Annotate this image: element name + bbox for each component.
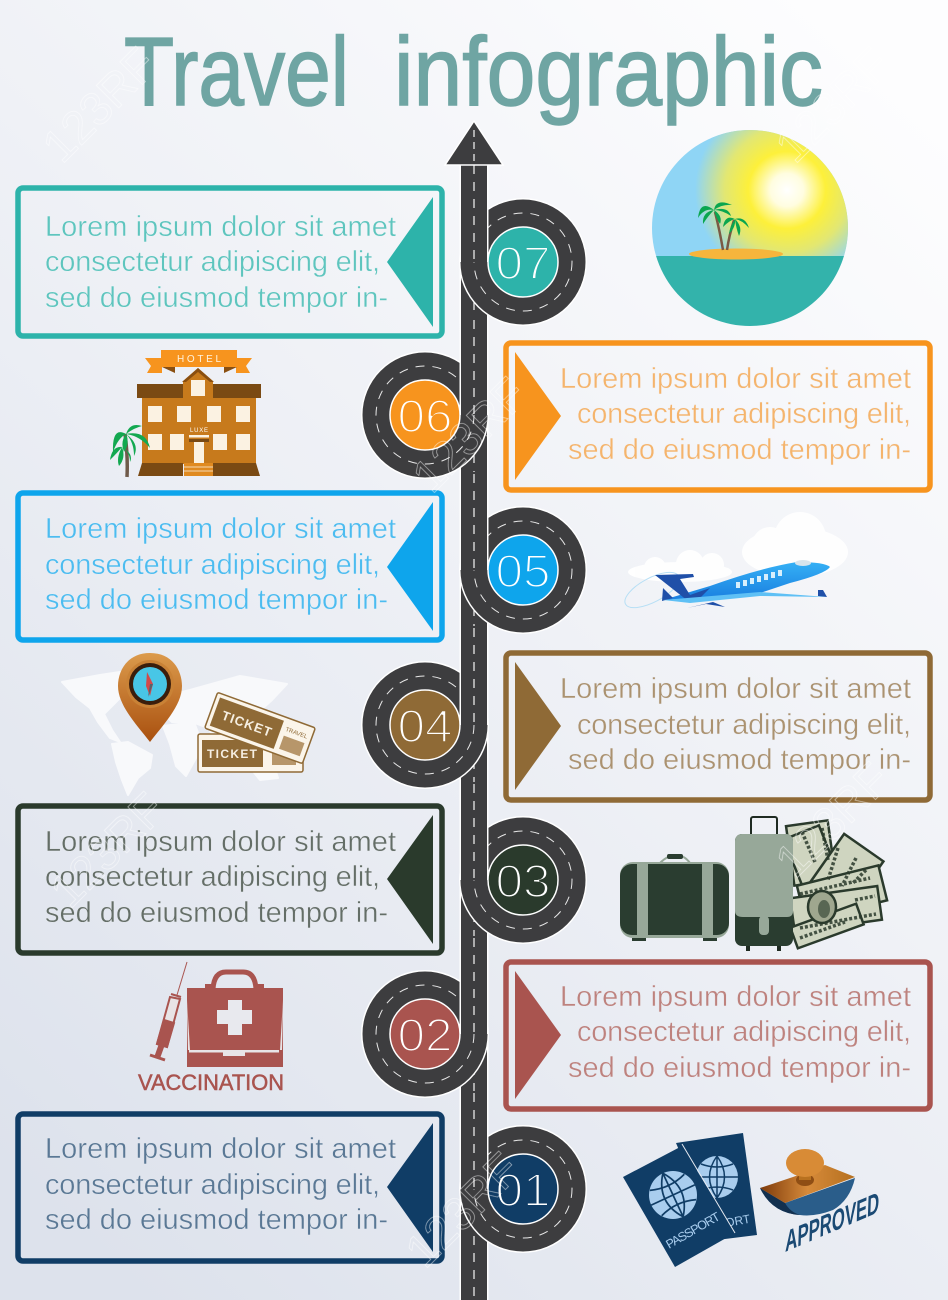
panel: step 07 text	[18, 188, 442, 336]
panel: step 01 text: Lorem ipsum dolor sit amet	[45, 1133, 396, 1165]
panel: step 06 text: Lorem ipsum dolor sit amet	[560, 363, 911, 395]
panel: step 07 text: consectetur adipiscing elit,	[45, 246, 380, 278]
timeline road	[361, 121, 587, 1300]
watermarks: 123RF	[395, 1143, 530, 1277]
road shaft	[460, 160, 488, 1300]
ticket front	[205, 692, 315, 764]
map pin	[118, 653, 182, 742]
ticket back	[198, 734, 303, 772]
panel: step 02 text: sed do eiusmod tempor in-	[568, 1052, 911, 1084]
panel: step 06 text	[506, 343, 930, 490]
road loop 01: 01	[496, 1164, 550, 1216]
road loop 04: 04	[398, 700, 452, 752]
panel: step 04 text	[506, 653, 930, 800]
panel: step 02 text: consectetur adipiscing elit,	[577, 1016, 911, 1048]
watermarks: 123RF	[765, 753, 900, 887]
syringe	[150, 962, 187, 1060]
medical case	[187, 972, 283, 1067]
icon: tropical island and sun	[652, 130, 848, 326]
icon: hotel with palm: HOTEL	[177, 354, 221, 365]
back passport	[676, 1133, 757, 1240]
world map	[62, 672, 287, 795]
road loop 01	[459, 1091, 587, 1253]
icon: hotel with palm: LUXE	[190, 428, 208, 434]
road loop 06	[361, 318, 489, 479]
panel: step 07 text: Lorem ipsum dolor sit amet	[45, 211, 396, 243]
road loop 02	[361, 936, 489, 1098]
icon: luggage and money	[620, 817, 887, 951]
icon: hotel with palm	[110, 350, 261, 477]
road loop 07: 07	[496, 237, 550, 289]
panel: step 01 text: consectetur adipiscing elit,	[45, 1169, 380, 1201]
panel: step 03 text: consectetur adipiscing elit,	[45, 861, 380, 893]
road loop 03: 03	[496, 855, 550, 907]
panel: step 05 text: Lorem ipsum dolor sit amet	[45, 513, 396, 545]
panel: step 05 text: sed do eiusmod tempor in-	[45, 584, 388, 616]
panel: step 04 text: consectetur adipiscing elit,	[577, 709, 911, 741]
road loop 05	[459, 472, 587, 634]
panel: step 03 text: Lorem ipsum dolor sit amet	[45, 826, 396, 858]
road loop 03	[459, 782, 587, 944]
icon: passports and approved stamp	[623, 1133, 880, 1267]
road loop 06: 06	[398, 390, 452, 442]
panel: step 04 text: sed do eiusmod tempor in-	[568, 744, 911, 776]
panel: step 02 text	[506, 962, 930, 1109]
panel: step 03 text	[18, 806, 442, 953]
rubber stamp	[760, 1149, 855, 1215]
panel: step 06 text: consectetur adipiscing elit,	[577, 398, 911, 430]
panel: step 05 text: consectetur adipiscing elit,	[45, 549, 380, 581]
icon: airplane with clouds	[620, 512, 848, 615]
watermarks: 123RF	[32, 38, 167, 172]
money fan	[784, 820, 887, 948]
panel: step 07 text: sed do eiusmod tempor in-	[45, 282, 388, 314]
road loop 07	[459, 162, 587, 326]
watermarks: 123RF	[765, 38, 900, 172]
title: infographic	[394, 17, 823, 126]
watermarks: 123RF	[40, 783, 175, 917]
icon: world map with pin and tickets	[62, 653, 315, 795]
ticket front: TRAVEL	[284, 727, 309, 741]
back passport: ORT	[724, 1212, 752, 1230]
panel: step 05 text	[18, 493, 442, 640]
rolling suitcase	[735, 817, 793, 951]
panel: step 04 text: Lorem ipsum dolor sit amet	[560, 673, 911, 705]
panel: step 01 text	[18, 1114, 442, 1261]
vaccination label: VACCINATION	[138, 1070, 284, 1095]
road arrowhead	[445, 121, 503, 165]
road loop 05: 05	[496, 545, 550, 597]
approved mark: APPROVED	[785, 1186, 880, 1259]
title	[124, 17, 823, 126]
watermarks: 123RF	[402, 368, 537, 502]
panel: step 03 text: sed do eiusmod tempor in-	[45, 897, 388, 929]
ticket front: TICKET	[220, 708, 274, 740]
front passport	[623, 1144, 735, 1267]
travel case	[620, 854, 729, 941]
icon: vaccination kit and syringe	[138, 962, 284, 1095]
ticket back: TICKET	[207, 747, 258, 761]
panel: step 01 text: sed do eiusmod tempor in-	[45, 1204, 388, 1236]
panel: step 06 text: sed do eiusmod tempor in-	[568, 434, 911, 466]
road loop 02: 02	[398, 1009, 452, 1061]
title: Travel	[124, 17, 349, 126]
front passport: PASSPORT	[664, 1209, 723, 1252]
panel: step 02 text: Lorem ipsum dolor sit amet	[560, 981, 911, 1013]
road loop 04	[361, 626, 489, 789]
